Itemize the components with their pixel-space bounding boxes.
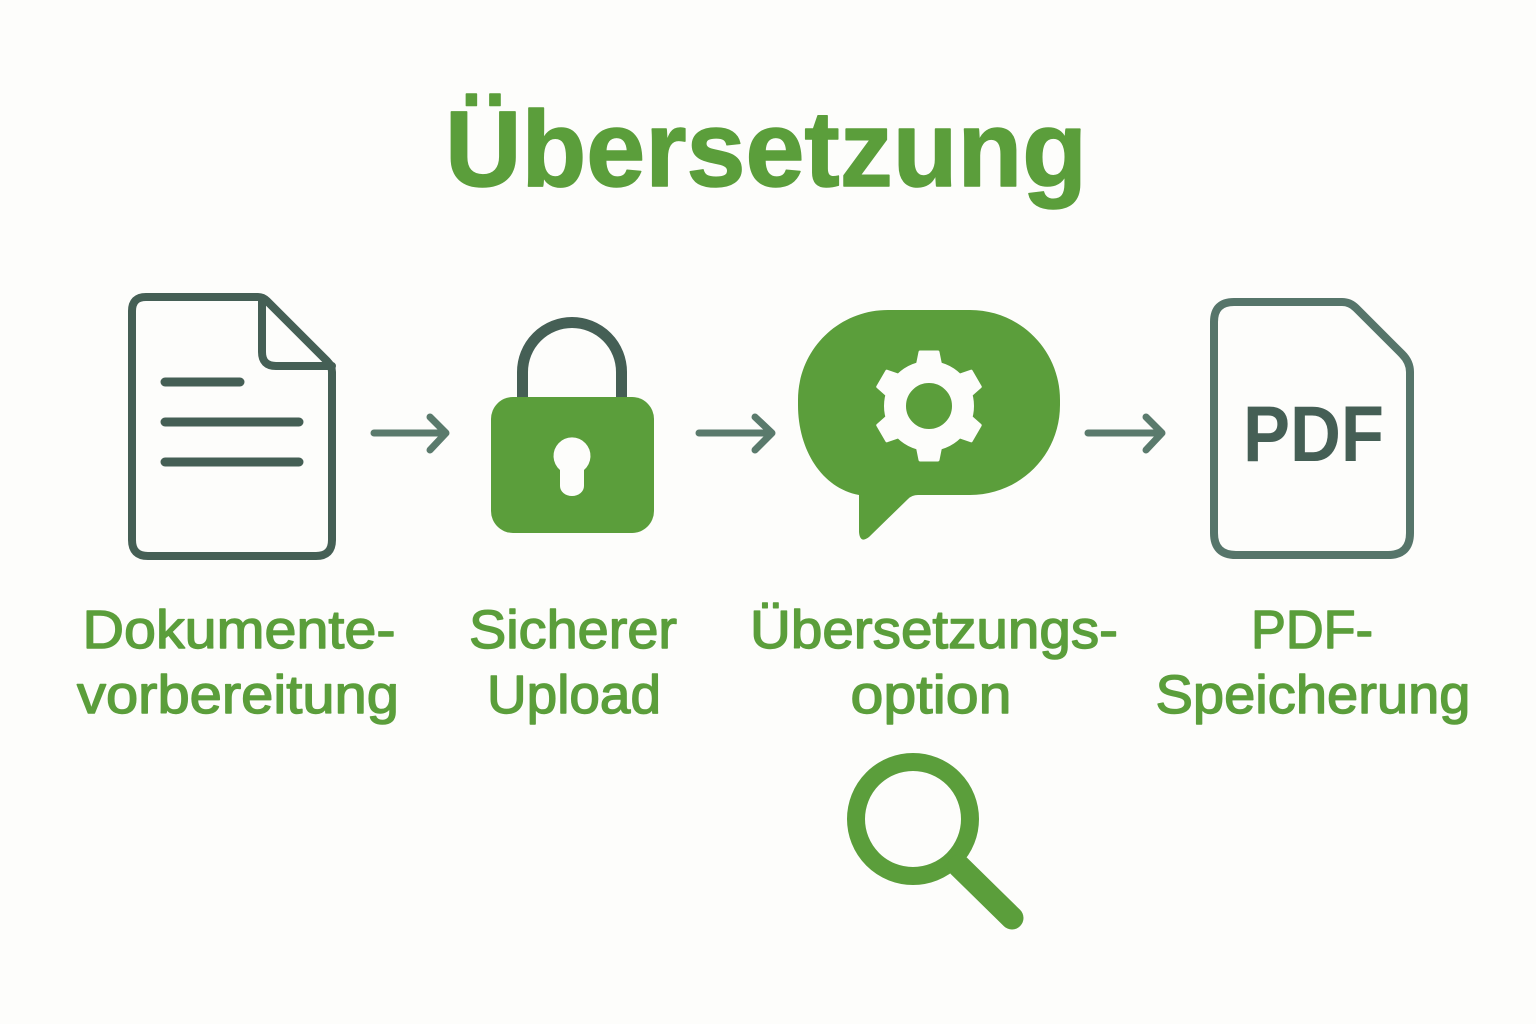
icon: padlock	[491, 322, 654, 533]
arrow: document to upload	[374, 417, 446, 450]
icon: PDF file: PDF	[1243, 389, 1384, 478]
label: Übersetzungsoption	[750, 600, 1118, 725]
label: Sicherer Upload: Sicherer	[469, 600, 677, 660]
label: Sicherer Upload: Upload	[487, 665, 661, 725]
label: PDF-Speicherung	[1156, 600, 1470, 725]
label: Sicherer Upload	[469, 600, 677, 725]
label: Dokumentevorbereitung	[77, 600, 399, 725]
label: PDF-Speicherung: Speicherung	[1156, 665, 1470, 725]
label: Übersetzungsoption: Übersetzungs-	[750, 600, 1118, 660]
icon: document	[132, 297, 332, 556]
icon: magnifying glass	[856, 762, 1012, 918]
label: Dokumentevorbereitung: Dokumente-	[82, 600, 396, 660]
label: Dokumentevorbereitung: vorbereitung	[77, 665, 399, 725]
label: PDF-Speicherung: PDF-	[1251, 600, 1373, 660]
icon: PDF file	[1214, 302, 1410, 555]
label: Übersetzungsoption: option	[850, 665, 1012, 725]
arrow: translation to PDF	[1088, 417, 1162, 450]
gear	[876, 352, 982, 460]
title: Übersetzung	[445, 88, 1087, 209]
arrow: upload to translation	[699, 417, 772, 450]
icon: speech bubble with gear	[798, 310, 1060, 540]
